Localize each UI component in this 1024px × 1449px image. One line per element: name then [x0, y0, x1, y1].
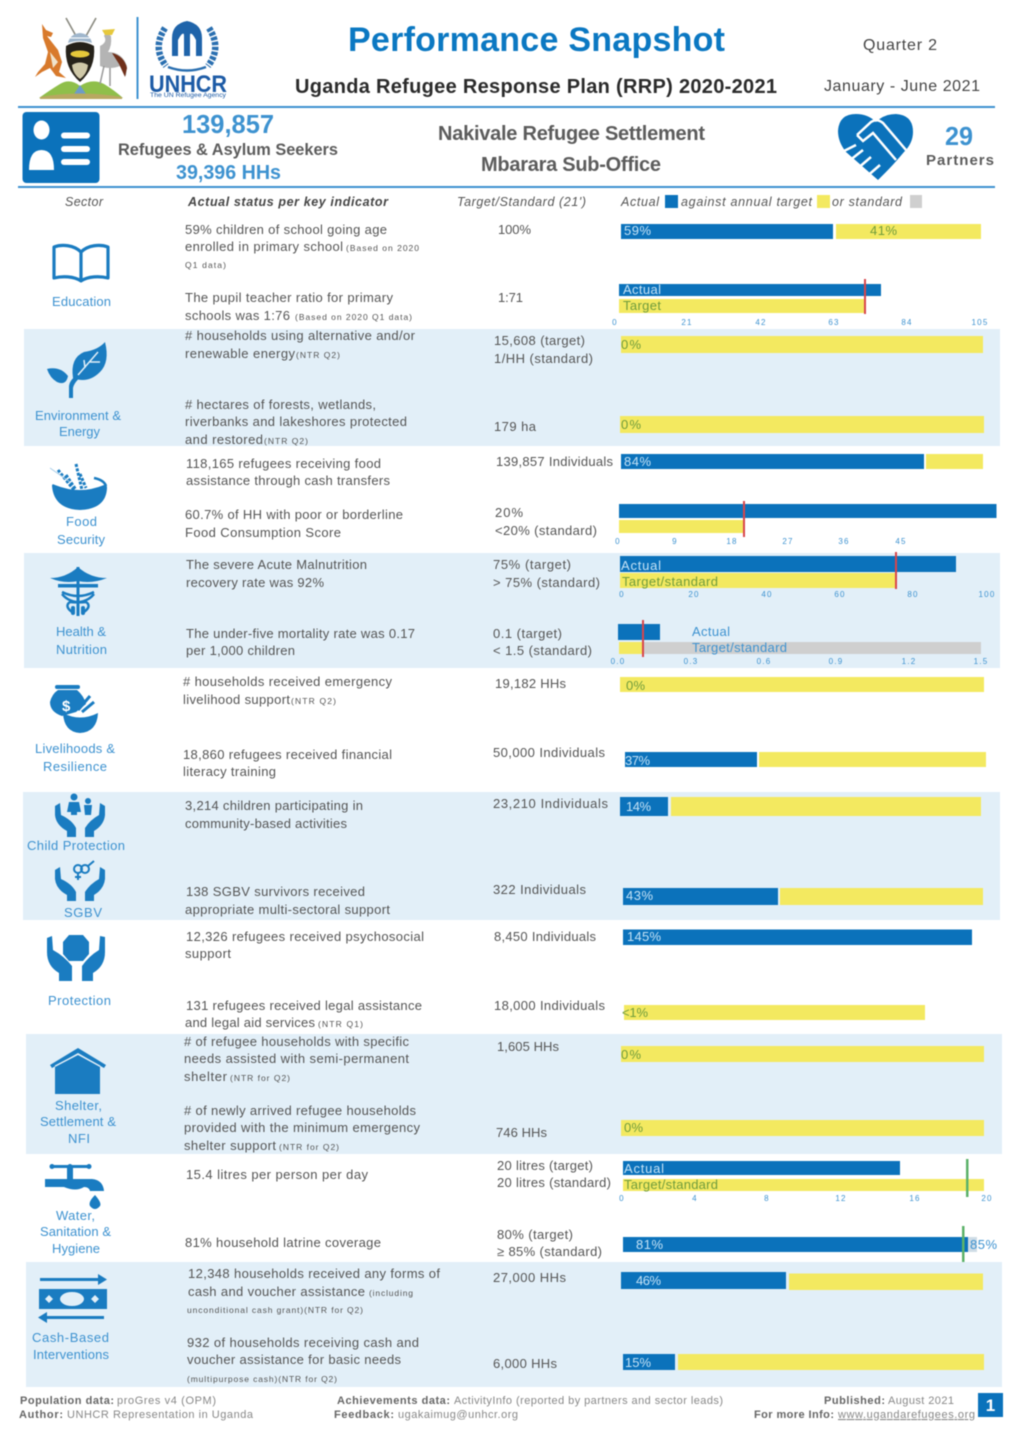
data sources: UNHCR Representation in Uganda: [67, 1409, 254, 1421]
target: 100%: [498, 222, 531, 237]
indicator: emergency shelter: provided with the minimum emergency: [184, 1120, 420, 1135]
target: 0.1 (target): [493, 626, 562, 641]
bar: renewable energy: 0%: [621, 337, 641, 352]
bar: cash and voucher: 46%: [636, 1273, 661, 1288]
indicator: psychosocial: support: [185, 946, 231, 961]
publication: [754, 1395, 975, 1421]
panel: Environment and Energy: [24, 328, 1000, 447]
bar: psychosocial: [623, 929, 972, 945]
sector label: Nutrition: [56, 642, 107, 657]
panel: Health and Nutrition: [24, 552, 1000, 668]
indicator: renewable energy: renewable energy: [185, 346, 296, 361]
indicator: malnutrition: recovery rate was 92%: [186, 575, 324, 590]
indicator: psychosocial: 12,326 refugees received psychosocial: [186, 929, 424, 944]
indicator: psychosocial: [185, 929, 424, 961]
indicator: community activities: 3,214 children participating in: [185, 798, 363, 813]
panel: Water, Sanitation and Hygiene: [40, 1158, 997, 1265]
sector label: Education: [52, 294, 111, 309]
page number: 1: [986, 1396, 995, 1415]
target: 27,000 HHs: [493, 1270, 566, 1285]
indicator: financial literacy: literacy training: [183, 764, 276, 779]
indicator: pupil teacher ratio: (Based on 2020 Q1 data): [295, 312, 412, 322]
panel: Education: [52, 222, 988, 327]
data sources: Population data:: [20, 1395, 114, 1407]
sector label: Energy: [59, 424, 100, 439]
bar chart: mortality: 0.9: [829, 657, 843, 666]
bar chart: litres per day: 12: [835, 1194, 847, 1203]
indicator: food consumption: 60.7% of HH with poor or borderline: [185, 507, 403, 522]
indicator: cash and voucher: (including: [369, 1288, 413, 1298]
bar chart: litres per day: [619, 1159, 993, 1203]
sector label: Resilience: [43, 759, 107, 774]
bar chart: malnutrition: Target/standard: [622, 574, 718, 589]
bar chart: food consumption: 9: [672, 537, 678, 546]
indicator: semi-permanent shelter: [184, 1034, 410, 1084]
legend: Actual: [620, 195, 660, 209]
sector label: Water,: [56, 1208, 95, 1223]
logo: UNHCR: [149, 21, 227, 99]
indicator: financial literacy: [183, 747, 392, 779]
sector label: Hygiene: [52, 1241, 100, 1256]
bar: financial literacy: [625, 752, 986, 768]
bar chart: litres per day: 4: [692, 1194, 698, 1203]
sector label: [35, 408, 121, 439]
target: 18,000 Individuals: [494, 998, 606, 1013]
bar chart: litres per day: 8: [764, 1194, 770, 1203]
bar chart: litres per day: 20: [981, 1194, 993, 1203]
icon: book: [54, 245, 108, 281]
target: 19,182 HHs: [495, 676, 566, 691]
target: 6,000 HHs: [493, 1356, 558, 1371]
bar: renewable energy: [621, 336, 983, 353]
bar: SGBV support: 43%: [626, 888, 653, 903]
sector label: Settlement &: [40, 1114, 116, 1129]
indicator: emergency livelihood: (NTR Q2): [291, 696, 336, 706]
bar chart: litres per day: 16: [909, 1194, 921, 1203]
indicator: cash and voucher: unconditional cash grant)(NTR for Q2): [187, 1305, 363, 1315]
target: < 1.5 (standard): [493, 643, 592, 658]
target: 139,857 Individuals: [496, 454, 614, 469]
target: [497, 1158, 611, 1190]
indicator: emergency shelter: [184, 1103, 420, 1153]
sector label: NFI: [68, 1131, 90, 1146]
band: [26, 1262, 1002, 1387]
population: Refugees & Asylum Seekers: [118, 140, 338, 159]
achievements: ActivityInfo (reported by partners and sector leads): [454, 1395, 723, 1407]
indicator: legal assistance: [185, 998, 422, 1030]
indicator: under-five mortality: per 1,000 children: [186, 643, 295, 658]
indicator: food assistance: assistance through cash transfers: [186, 473, 390, 488]
panel: Cash-Based Interventions: [26, 1262, 1002, 1387]
sector label: Livelihoods &: [35, 741, 115, 756]
sector label: Shelter,: [55, 1098, 102, 1113]
settlement: Nakivale Refugee Settlement: [438, 123, 705, 145]
partners: Partners: [926, 152, 994, 169]
indicator: malnutrition: The severe Acute Malnutrition: [186, 557, 367, 572]
target: 15,608 (target): [494, 333, 585, 348]
target: 8,450 Individuals: [494, 929, 596, 944]
target: 20%: [495, 505, 523, 520]
summary strip: [22, 109, 994, 184]
indicator: semi-permanent shelter: (NTR for Q2): [230, 1073, 290, 1083]
indicator: renewable energy: (NTR Q2): [296, 350, 340, 360]
indicator: semi-permanent shelter: # of refugee households with specific: [184, 1034, 410, 1049]
indicator: cash and voucher: cash and voucher assistance: [188, 1284, 365, 1299]
bar chart: mortality: 0.0: [611, 657, 625, 666]
bar: basic needs: 15%: [625, 1355, 651, 1370]
bar: financial literacy: 37%: [625, 753, 650, 768]
icon: handshake heart: [838, 114, 913, 180]
panel: Shelter, Settlement and NFI: [26, 1034, 1002, 1154]
indicator: emergency shelter: (NTR for Q2): [279, 1142, 339, 1152]
indicator: emergency shelter: shelter support: [184, 1138, 276, 1153]
bar chart: malnutrition: 100: [979, 590, 995, 599]
sector label: Environment &: [35, 408, 121, 423]
target: 80% (target): [497, 1227, 573, 1242]
bar chart: malnutrition: 60: [834, 590, 846, 599]
icon: Uganda coat of arms: [35, 18, 127, 99]
bar chart: litres per day: 0: [619, 1194, 625, 1203]
target: 746 HHs: [496, 1125, 548, 1140]
bar: semi-permanent shelter: 0%: [621, 1047, 641, 1062]
bar chart: mortality: Target/standard: [692, 640, 787, 655]
indicator: cash and voucher: [187, 1266, 440, 1315]
panel: Livelihoods and Resilience: [35, 674, 986, 779]
target: [493, 626, 592, 658]
panel: Protection: [47, 929, 972, 1030]
bar: latrine coverage: 81%: [636, 1237, 663, 1252]
sector label: Health &: [56, 624, 106, 639]
bar: legal assistance: [622, 1005, 925, 1020]
target: [497, 1227, 602, 1259]
bar: psychosocial: 145%: [627, 929, 661, 944]
data sources: Author:: [19, 1409, 63, 1421]
icon: hands around person: [47, 935, 105, 981]
indicator: food consumption: Food Consumption Score: [185, 525, 341, 540]
bar chart: mortality: 0.6: [757, 657, 771, 666]
bar chart: pupil teacher ratio: 21: [681, 318, 693, 327]
partners: [926, 121, 994, 169]
icon: money bag and bowl: [50, 685, 98, 733]
sector label: Interventions: [33, 1347, 110, 1362]
target: 1/HH (standard): [494, 351, 593, 366]
bar chart: malnutrition: 80: [907, 590, 919, 599]
indicator: litres per day: 15.4 litres per person per day: [186, 1167, 368, 1182]
bar chart: mortality: 0.3: [684, 657, 698, 666]
bar chart: malnutrition: [619, 552, 995, 599]
subtitle: Uganda Refugee Response Plan (RRP) 2020-2021: [295, 76, 777, 98]
bar: community activities: [620, 797, 981, 816]
page number: [978, 1393, 1003, 1417]
bar: hectares: [620, 416, 984, 433]
bar chart: litres per day: Target/standard: [624, 1177, 718, 1192]
indicator: legal assistance: (NTR Q1): [318, 1019, 363, 1029]
indicator: basic needs: voucher assistance for basic needs: [187, 1352, 402, 1367]
indicator: hectares: [185, 397, 407, 447]
bar chart: enrolment: 41%: [870, 223, 897, 238]
bar chart: litres per day: Actual: [624, 1161, 664, 1176]
indicator: enrolment: (Based on 2020: [346, 243, 419, 253]
indicator: basic needs: 932 of households receiving cash and: [187, 1335, 419, 1350]
indicator: hectares: # hectares of forests, wetlands,: [185, 397, 376, 412]
band: [23, 792, 1000, 920]
band: [26, 1034, 1002, 1154]
period: January - June 2021: [824, 78, 980, 95]
bar chart: food consumption: 36: [838, 537, 850, 546]
target: <20% (standard): [495, 523, 597, 538]
indicator: emergency livelihood: # households received emergency: [183, 674, 392, 689]
sector label: Child Protection: [27, 838, 125, 853]
indicator: enrolment: [185, 222, 419, 270]
indicator: emergency livelihood: [183, 674, 392, 707]
indicator: financial literacy: 18,860 refugees received financial: [183, 747, 392, 762]
target: 20 litres (target): [497, 1158, 593, 1173]
target: 322 Individuals: [493, 882, 586, 897]
bar: food assistance: [621, 454, 983, 469]
data sources: proGres v4 (OPM): [117, 1395, 216, 1407]
bar: latrine coverage: [623, 1226, 997, 1265]
indicator: hectares: riverbanks and lakeshores protected: [185, 414, 407, 429]
sector label: Food: [66, 514, 97, 529]
indicator: legal assistance: and legal aid services: [185, 1015, 316, 1030]
table heading: Target/Standard (21'): [457, 195, 586, 209]
indicator: SGBV support: [185, 884, 390, 917]
bar chart: pupil teacher ratio: 84: [901, 318, 913, 327]
indicator: food assistance: [186, 456, 390, 488]
band: [24, 553, 1000, 668]
icon: house: [50, 1048, 106, 1094]
bar chart: food consumption: 0: [615, 537, 621, 546]
target: 20 litres (standard): [497, 1175, 611, 1190]
bar chart: enrolment: 59%: [624, 223, 651, 238]
bar chart: malnutrition: Actual: [621, 558, 661, 573]
icon: leaf: [47, 342, 107, 398]
bar: community activities: 14%: [626, 799, 651, 814]
target: ≥ 85% (standard): [497, 1244, 602, 1259]
indicator: food consumption: [185, 507, 403, 540]
bar chart: mortality: Actual: [692, 624, 730, 639]
sector label: [35, 741, 115, 774]
icon: tap: [45, 1164, 104, 1209]
settlement: [438, 123, 705, 176]
panel: Food Security: [50, 454, 996, 547]
indicator: food assistance: 118,165 refugees receiving food: [186, 456, 381, 471]
indicator: cash and voucher: 12,348 households received any forms of: [188, 1266, 440, 1281]
indicator: under-five mortality: The under-five mortality rate was 0.17: [186, 626, 415, 641]
indicator: SGBV support: appropriate multi-sectoral support: [185, 902, 390, 917]
logo: UNHCR: UNHCR: [149, 71, 227, 98]
population: [118, 109, 338, 184]
data sources: [19, 1395, 254, 1421]
sector label: [57, 514, 106, 547]
bar chart: pupil teacher ratio: 42: [755, 318, 767, 327]
indicator: enrolment: 59% children of school going age: [185, 222, 387, 237]
panel: Child Protection and SGBV: [23, 792, 1000, 920]
target: 1:71: [498, 290, 523, 305]
indicator: basic needs: [187, 1335, 419, 1384]
rule: header: [18, 106, 995, 108]
quarter: Quarter 2: [863, 37, 937, 54]
bar: latrine coverage: 85%: [970, 1237, 997, 1252]
icon: caduceus: [50, 567, 107, 616]
bar chart: mortality: [611, 620, 988, 666]
bar chart: pupil teacher ratio: 0: [612, 318, 618, 327]
bar: legal assistance: <1%: [622, 1005, 648, 1020]
indicator: basic needs: (multipurpose cash)(NTR for Q2): [187, 1374, 337, 1384]
achievements: [334, 1395, 723, 1421]
indicator: hectares: (NTR Q2): [264, 436, 308, 446]
target: 23,210 Individuals: [493, 796, 608, 811]
publication: August 2021: [888, 1395, 954, 1407]
indicator: latrine coverage: 81% household latrine coverage: [185, 1235, 381, 1250]
legend: against annual target: [681, 195, 813, 209]
bar: emergency livelihood: [620, 677, 984, 693]
target: [493, 557, 600, 590]
bar chart: pupil teacher ratio: Target: [623, 298, 661, 313]
bar chart: enrolment: [621, 223, 981, 239]
publication: Published:: [824, 1395, 885, 1407]
legend: [620, 195, 922, 209]
bar: SGBV support: [623, 888, 983, 905]
indicator: enrolment: Q1 data): [185, 260, 226, 270]
achievements: Achievements data:: [337, 1395, 450, 1407]
divider: logos: [136, 17, 138, 99]
indicator: renewable energy: # households using alternative and/or: [185, 328, 416, 343]
indicator: malnutrition: [186, 557, 367, 590]
bar: hectares: 0%: [621, 417, 641, 432]
bar chart: pupil teacher ratio: [612, 279, 988, 327]
bar: emergency shelter: 0%: [624, 1120, 643, 1135]
bar chart: malnutrition: 0: [619, 590, 625, 599]
indicator: legal assistance: 131 refugees received legal assistance: [186, 998, 422, 1013]
indicator: pupil teacher ratio: The pupil teacher ratio for primary: [185, 290, 394, 305]
icon: banknote with arrows: [38, 1274, 107, 1323]
bar chart: pupil teacher ratio: 63: [828, 318, 840, 327]
indicator: emergency livelihood: livelihood support: [183, 692, 290, 707]
rule: summary: [18, 186, 995, 188]
sector label: Protection: [48, 993, 111, 1008]
indicator: pupil teacher ratio: schools was 1:76: [185, 308, 290, 323]
bar: semi-permanent shelter: [621, 1046, 984, 1062]
legend: or standard: [832, 195, 903, 209]
target: 50,000 Individuals: [493, 745, 606, 760]
indicator: community activities: community-based activities: [185, 816, 348, 831]
sector label: SGBV: [64, 905, 102, 920]
sector label: [40, 1098, 116, 1146]
bar chart: malnutrition: 40: [761, 590, 773, 599]
target: > 75% (standard): [493, 575, 600, 590]
achievements: Feedback:: [334, 1409, 394, 1421]
sector label: Security: [57, 532, 106, 547]
sector label: Sanitation &: [40, 1224, 111, 1239]
bar: basic needs: [623, 1354, 984, 1370]
icon: money bag and bowl: $: [62, 698, 71, 715]
sector label: [32, 1330, 110, 1362]
target: 1,605 HHs: [497, 1039, 560, 1054]
sector label: [40, 1208, 111, 1256]
indicator: pupil teacher ratio: [185, 290, 412, 323]
icon: person card: [22, 112, 100, 183]
table heading: Sector: [65, 195, 104, 209]
table heading: Actual status per key indicator: [187, 195, 389, 209]
indicator: emergency shelter: # of newly arrived refugee households: [184, 1103, 416, 1118]
indicator: renewable energy: [185, 328, 416, 361]
target: 75% (target): [493, 557, 571, 572]
bar: cash and voucher: [621, 1272, 983, 1290]
bar chart: food consumption: [615, 501, 996, 546]
indicator: enrolment: enrolled in primary school: [185, 239, 343, 254]
sector label: Cash-Based: [32, 1330, 109, 1345]
bar chart: mortality: 1.2: [902, 657, 916, 666]
bar: food assistance: 84%: [624, 454, 651, 469]
indicator: hectares: and restored: [185, 432, 263, 447]
indicator: semi-permanent shelter: needs assisted with semi-permanent: [184, 1051, 409, 1066]
icon: child protection hands: [55, 794, 105, 837]
bar chart: malnutrition: 20: [688, 590, 700, 599]
table heading: [65, 195, 922, 209]
header: [35, 17, 980, 99]
bar: emergency shelter: [621, 1120, 984, 1136]
bar: emergency livelihood: 0%: [626, 678, 645, 693]
bar chart: pupil teacher ratio: 105: [972, 318, 988, 327]
title: Performance Snapshot: [348, 21, 725, 59]
target: 179 ha: [494, 419, 537, 434]
icon: bowl with wheat: [50, 464, 107, 510]
sector label: [56, 624, 107, 657]
icon: SGBV hands: [55, 861, 105, 901]
indicator: SGBV support: 138 SGBV survivors received: [186, 884, 365, 899]
bar chart: food consumption: 45: [895, 537, 907, 546]
indicator: semi-permanent shelter: shelter: [184, 1069, 228, 1084]
footer: [19, 1393, 1003, 1421]
target: [495, 505, 597, 538]
target: [494, 333, 593, 366]
bar chart: food consumption: 27: [782, 537, 794, 546]
bar chart: mortality: 1.5: [974, 657, 988, 666]
publication: www.ugandarefugees.org: [837, 1409, 975, 1421]
logo: UNHCR: The UN Refugee Agency: [150, 93, 226, 99]
bar chart: food consumption: 18: [726, 537, 738, 546]
indicator: community activities: [185, 798, 363, 831]
bar chart: pupil teacher ratio: Actual: [623, 282, 661, 297]
band: [24, 329, 1000, 446]
indicator: under-five mortality: [186, 626, 415, 658]
population: 139,857: [182, 109, 274, 139]
settlement: Mbarara Sub-Office: [481, 154, 661, 176]
partners: 29: [945, 121, 973, 151]
publication: For more Info:: [754, 1409, 834, 1421]
achievements: ugakaimug@unhcr.org: [398, 1409, 518, 1421]
population: 39,396 HHs: [176, 162, 281, 184]
